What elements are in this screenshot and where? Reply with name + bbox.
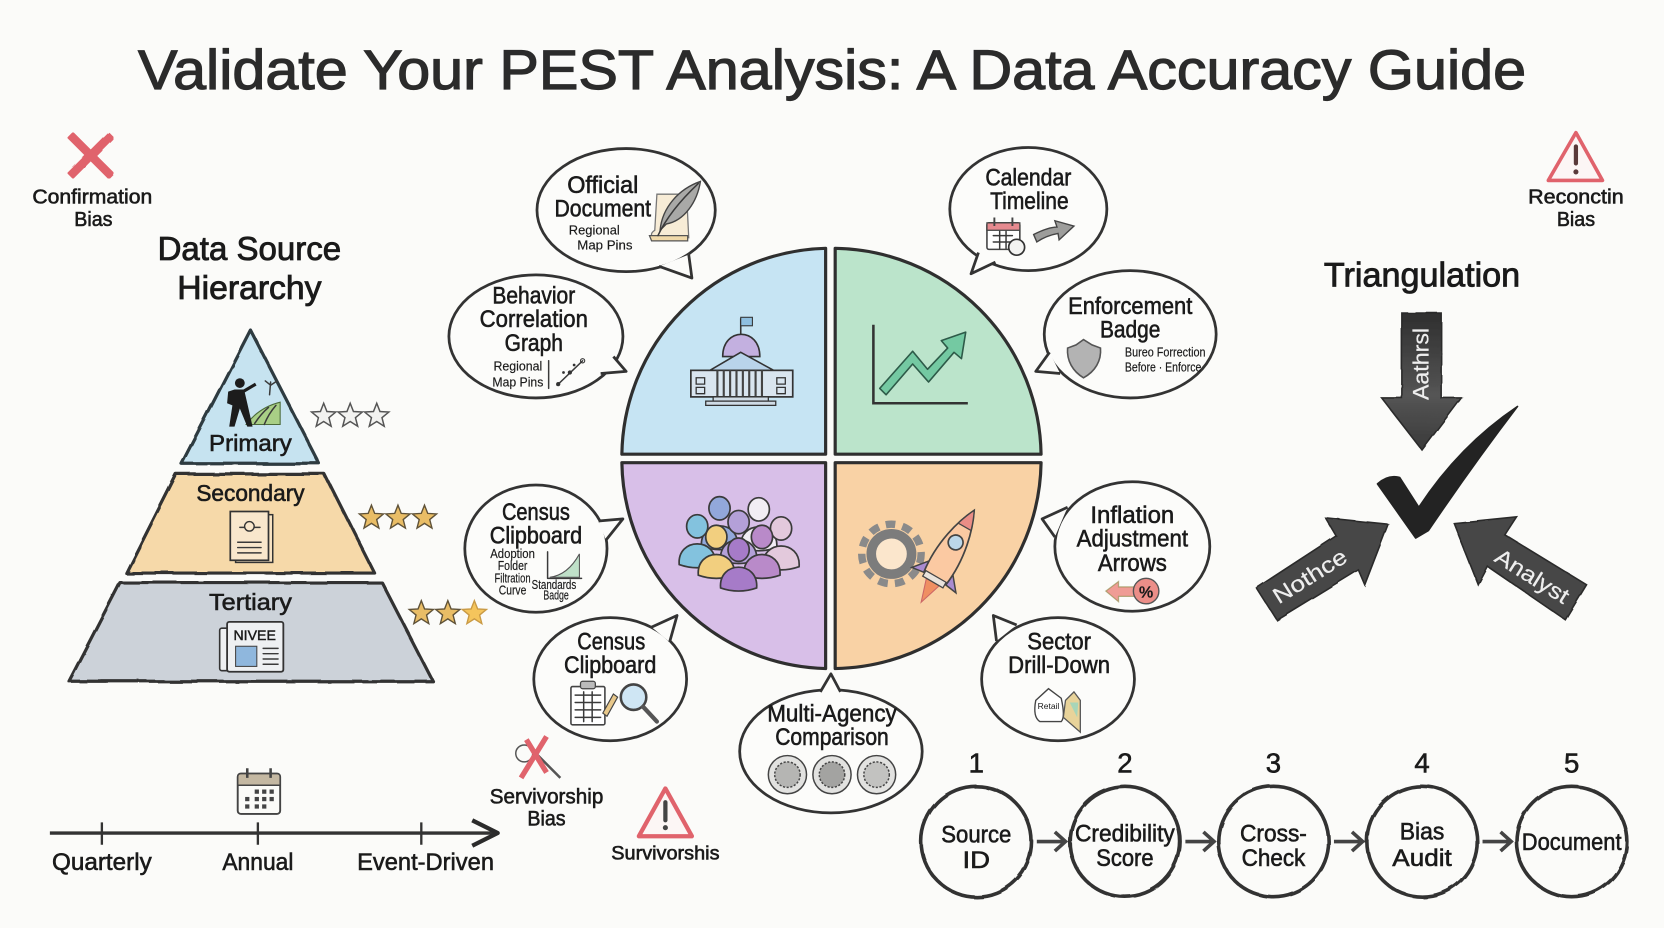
icon: warning triangle (1548, 133, 1602, 180)
icon: gear and rocket (862, 498, 996, 615)
tier rating: tertiary stars (409, 601, 486, 624)
step 3: Cross- (1240, 821, 1307, 848)
callout bubble: behavior correlation graph: Regional (493, 358, 542, 373)
pyramid tier: primary (181, 330, 319, 464)
callout bubble: behavior correlation graph: Map Pins (492, 374, 543, 389)
icon: agency seals (768, 756, 896, 794)
callout: confirmation bias: Bias (74, 209, 112, 231)
callout bubble: multi-agency comparison: Multi-Agency (767, 701, 897, 728)
icon: group of people (679, 497, 799, 591)
icon: warning triangle (639, 788, 692, 836)
step 5 (1516, 748, 1627, 897)
callout bubble: official document: Official (567, 172, 638, 199)
callout bubble: behavior correlation graph: Correlation (480, 306, 588, 333)
callout bubble: behavior correlation graph (449, 275, 626, 398)
heading: data source hierarchy (158, 230, 341, 306)
icon: percent arrow (1106, 578, 1159, 604)
step 4: Bias (1400, 818, 1444, 845)
icon: rising line chart (873, 325, 968, 403)
callout: servivorship bias: Servivorship (490, 785, 603, 808)
process: five validation steps (921, 748, 1627, 897)
callout bubble: sector drill-down (982, 615, 1134, 741)
timeline: update cadence (50, 768, 498, 876)
quadrant: political (622, 248, 826, 454)
callout bubble: census clipboard with adoption curve: Curve (499, 582, 526, 597)
timeline: update cadence: Quarterly (52, 849, 153, 876)
icon: correlation scatter (549, 359, 585, 388)
tier rating: secondary stars (359, 505, 437, 528)
callout bubble: official document: Regional (569, 223, 620, 238)
step 5: 5 (1564, 748, 1579, 779)
quadrant: economic (835, 248, 1041, 454)
callout bubble: census clipboard with adoption curve: Filtration (495, 571, 531, 586)
callout: confirmation bias (32, 135, 152, 231)
icon: clipboard (571, 681, 618, 725)
step 2: 2 (1117, 748, 1133, 779)
icon: quill and scroll (649, 181, 700, 241)
arrow: bottom left: Nothce (1268, 544, 1352, 609)
callout bubble: calendar timeline: Calendar (985, 165, 1071, 192)
icon: calendar and arrow (987, 218, 1074, 255)
icon: crossed-out tools (516, 736, 560, 778)
icon: red cross (70, 135, 111, 176)
icon: newspaper: NIVEE (233, 628, 276, 643)
step 4 (1367, 748, 1477, 897)
icon: tag and pin (1035, 689, 1080, 732)
quadrant: social (622, 463, 826, 669)
callout bubble: census clipboard with adoption curve: Standards (532, 577, 576, 592)
chart: PEST quadrant circle (622, 248, 1041, 669)
panel: triangulation: Triangulation (1324, 257, 1520, 295)
arrow: bottom right (1454, 517, 1587, 620)
callout: survivorship warning (611, 788, 720, 865)
callout bubble: census clipboard with adoption curve: Adoption (490, 546, 535, 561)
callout bubble: census clipboard with magnifier: Census (577, 628, 645, 655)
callout: confirmation bias: Confirmation (32, 187, 152, 209)
callout bubble: enforcement badge: Before · Enforce (1125, 359, 1201, 374)
callout bubble: enforcement badge: Bureo Forrection (1125, 345, 1206, 360)
step 1: Source (941, 822, 1011, 849)
panel: source pyramid (69, 330, 486, 681)
icon: tag and pin: Retail (1038, 701, 1059, 711)
callout bubble: census clipboard with adoption curve: Census (502, 499, 570, 526)
step 3 (1218, 748, 1329, 897)
step 3: Check (1242, 845, 1306, 872)
quadrant: technological (835, 463, 1041, 669)
callout: recency warning (1528, 133, 1624, 231)
panel: triangulation (1256, 257, 1587, 620)
callout bubble: calendar timeline (950, 148, 1107, 274)
callout: recency warning: Bias (1557, 209, 1595, 231)
icon: field researcher (227, 378, 280, 427)
title: Validate Your PEST Analysis: A Data Accuracy Guide (138, 39, 1526, 101)
step 2 (1070, 748, 1180, 897)
tier rating: primary stars (312, 403, 389, 426)
icon: mini curve chart (548, 552, 582, 578)
callout: servivorship bias: Bias (527, 808, 566, 831)
callout bubble: inflation adjustment arrows: Arrows (1098, 550, 1167, 577)
step 4: 4 (1414, 748, 1430, 779)
icon: stacked document (230, 511, 273, 562)
step 3: 3 (1266, 748, 1281, 779)
callout bubble: inflation adjustment arrows (1042, 482, 1210, 611)
callout bubble: enforcement badge: Enforcement (1068, 293, 1192, 320)
callout bubble: multi-agency comparison (740, 674, 922, 813)
heading: data source hierarchy: Hierarchy (177, 269, 322, 306)
callout bubble: calendar timeline: Timeline (990, 188, 1069, 215)
icon: magnifier (621, 684, 657, 722)
timeline: update cadence: Event-Driven (357, 849, 494, 876)
callout: servivorship bias (490, 736, 603, 831)
arrow: step 4 to 5 (1483, 832, 1511, 851)
callout bubble: official document: Document (554, 195, 651, 222)
step 5: Document (1522, 829, 1622, 856)
pyramid tier: tertiary (69, 583, 433, 681)
arrow: top: Aathrsl (1408, 328, 1433, 400)
icon: calendar (238, 768, 280, 814)
timeline: update cadence: Annual (222, 849, 293, 876)
icon: percent arrow: % (1139, 584, 1153, 601)
callout bubble: census clipboard with adoption curve: Clipboard (490, 522, 582, 549)
callout: recency warning: Reconctin (1528, 187, 1624, 209)
arrow: top (1382, 313, 1461, 450)
callout bubble: sector drill-down: Sector (1027, 628, 1091, 655)
callout bubble: census clipboard with adoption curve: Folder (498, 558, 528, 573)
heading: data source hierarchy: Data Source (158, 230, 341, 267)
callout bubble: sector drill-down: Drill-Down (1008, 652, 1110, 679)
callout bubble: inflation adjustment arrows: Inflation (1090, 502, 1174, 529)
arrow: step 2 to 3 (1185, 832, 1214, 851)
step 2: Score (1096, 845, 1154, 872)
callout bubble: multi-agency comparison: Comparison (775, 724, 889, 751)
icon: check mark (1377, 406, 1518, 538)
callout bubble: behavior correlation graph: Graph (505, 330, 563, 357)
callout bubble: census clipboard with adoption curve: Badge (543, 588, 569, 603)
callout bubble: inflation adjustment arrows: Adjustment (1077, 526, 1188, 553)
callout bubble: enforcement badge: Badge (1100, 316, 1160, 343)
callout bubble: behavior correlation graph: Behavior (492, 282, 575, 309)
arrow: bottom left (1256, 518, 1388, 620)
arrow: bottom right: Analyst (1490, 544, 1575, 609)
callout bubble: census clipboard with magnifier: Clipboard (564, 652, 656, 679)
callout bubble: census clipboard with magnifier (534, 615, 687, 741)
callout bubble: official document (537, 149, 715, 278)
step 4: Audit (1392, 845, 1452, 872)
step 1: 1 (969, 748, 984, 779)
step 1: ID (963, 847, 990, 874)
callout bubble: census clipboard with adoption curve (465, 485, 623, 612)
arrow: step 3 to 4 (1334, 832, 1363, 851)
callout: survivorship warning: Survivorshis (611, 844, 720, 865)
callout bubble: official document: Map Pins (577, 237, 632, 252)
step 1 (921, 748, 1032, 897)
pyramid tier: secondary: Secondary (196, 480, 305, 506)
pyramid tier: primary: Primary (209, 430, 292, 456)
pyramid tier: tertiary: Tertiary (209, 589, 292, 615)
icon: capitol building (691, 317, 793, 405)
callout bubble: enforcement badge (1036, 271, 1216, 398)
pyramid tier: secondary (126, 474, 375, 573)
icon: shield badge (1067, 340, 1101, 378)
icon: newspaper (220, 622, 283, 672)
arrow: step 1 to 2 (1037, 832, 1065, 851)
step 2: Credibility (1075, 821, 1176, 848)
